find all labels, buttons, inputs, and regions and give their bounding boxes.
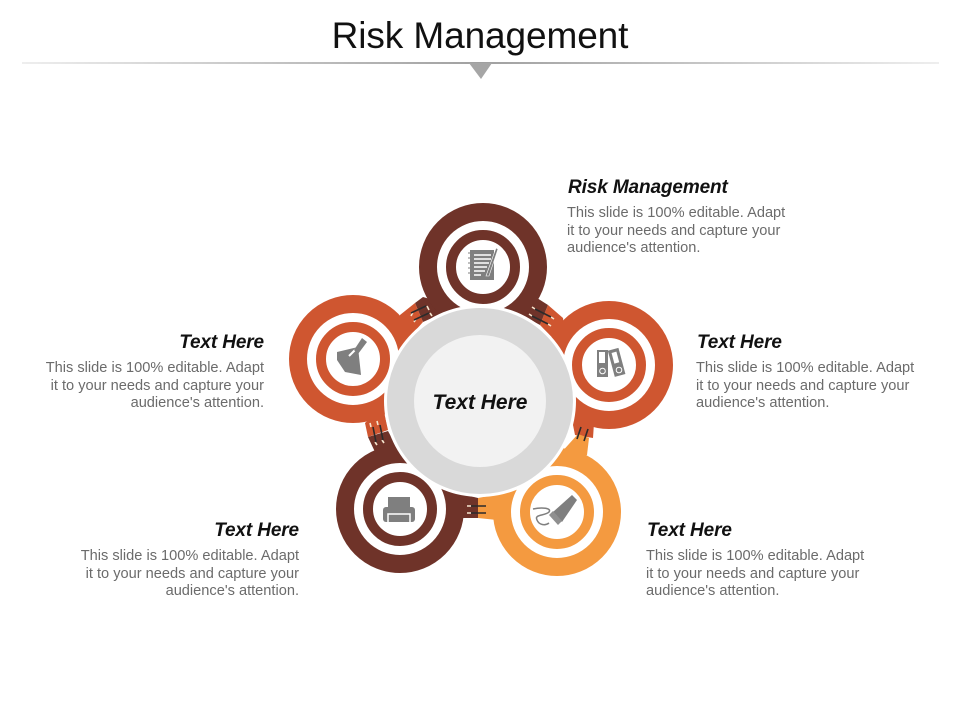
text block: top: audience's attention. (567, 240, 700, 256)
text block: left: audience's attention. (131, 395, 264, 411)
text block: bottom left (81, 520, 299, 599)
text block: right: This slide is 100% editable. Adapt (696, 360, 914, 376)
icon: notebook and pen (468, 248, 498, 280)
text block: left: Text Here (179, 332, 264, 353)
title divider with pointer (22, 62, 939, 79)
ring: left (298, 304, 408, 414)
text block: bottom left: it to your needs and capture your (86, 566, 299, 582)
center label: Text Here (433, 391, 527, 414)
text block: right: audience's attention. (696, 395, 829, 411)
staples (370, 306, 588, 513)
ring: bottom right (502, 457, 612, 567)
ring: top (428, 212, 538, 322)
title: Risk Management (332, 15, 628, 56)
text block: right: Text Here (697, 332, 782, 353)
text block: bottom left: This slide is 100% editable. Adapt (81, 548, 299, 564)
text block: right: it to your needs and capture your (696, 378, 909, 394)
connector tabs (365, 297, 594, 520)
text block: top: Risk Management (568, 177, 728, 198)
icon: pin on paper (337, 338, 367, 375)
ring: bottom left (345, 454, 455, 564)
text block: top: it to your needs and capture your (567, 222, 780, 238)
text block: bottom right: Text Here (647, 520, 732, 541)
text block: bottom right (646, 520, 864, 599)
text block: top (567, 177, 786, 256)
text block: bottom left: Text Here (214, 520, 299, 541)
text block: right (696, 332, 914, 411)
center circle (384, 305, 576, 497)
text block: left: This slide is 100% editable. Adapt (46, 360, 264, 376)
text block: bottom right: This slide is 100% editable. Adapt (646, 548, 864, 564)
text block: left: it to your needs and capture your (51, 378, 264, 394)
text block: bottom right: it to your needs and capture your (646, 566, 859, 582)
text block: top: This slide is 100% editable. Adapt (567, 205, 785, 221)
icon: printer (383, 497, 415, 523)
ring: right (554, 310, 664, 420)
text block: bottom left: audience's attention. (166, 583, 299, 599)
icon: marker (533, 495, 577, 525)
text block: bottom right: audience's attention. (646, 583, 779, 599)
icon: binders (597, 348, 625, 377)
text block: left (46, 332, 264, 411)
